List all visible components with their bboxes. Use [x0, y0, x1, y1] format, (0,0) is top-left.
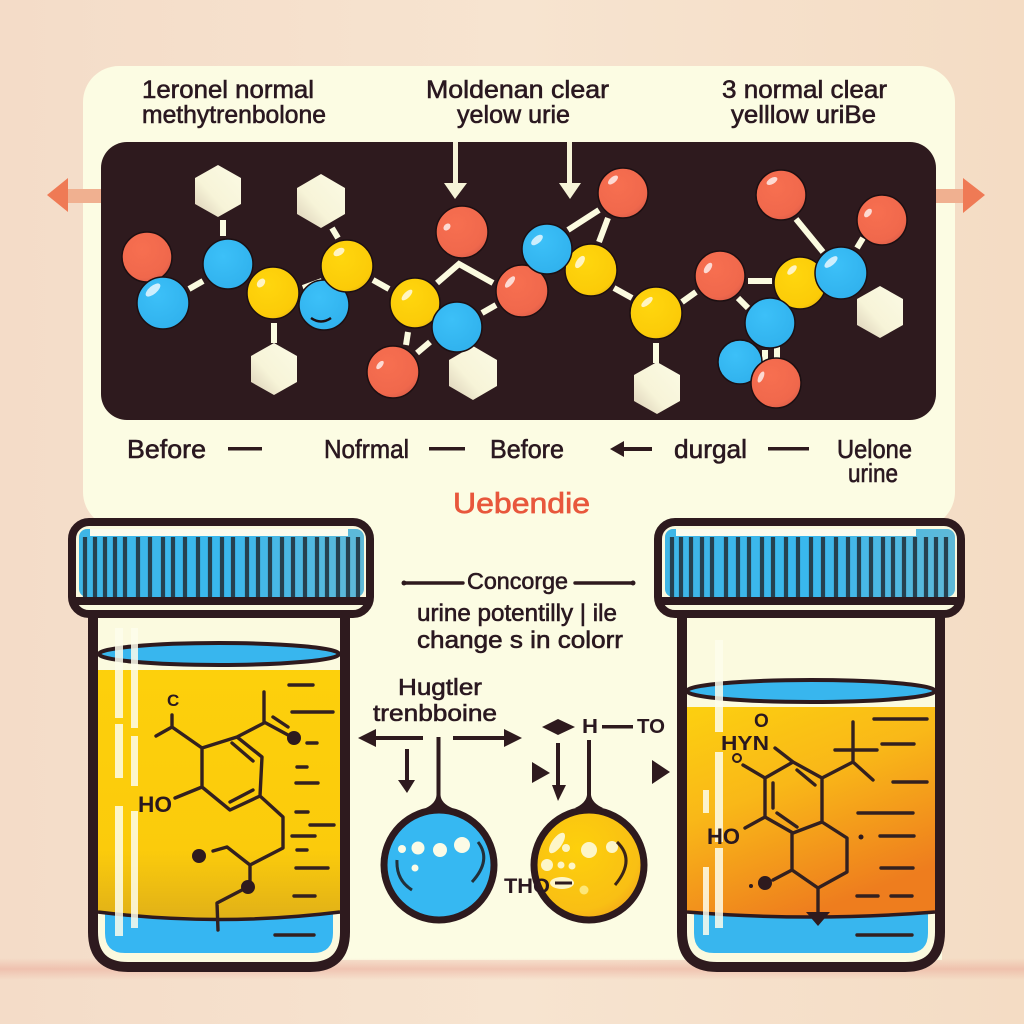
THO label — [504, 875, 574, 898]
center heading label: Moldenan clear — [426, 76, 609, 104]
measurement ticks — [275, 685, 334, 935]
arrow: left from stem — [358, 729, 423, 747]
arrow: triangle two — [652, 760, 670, 784]
jar body — [682, 610, 940, 967]
chemical structure: HYN — [721, 733, 769, 755]
jar: right after — [658, 522, 961, 967]
glass reflections — [703, 640, 723, 935]
trenbolone label: Hugtler — [398, 674, 482, 700]
arrow: right orange — [936, 178, 985, 213]
yellow urine — [98, 670, 340, 921]
timeline label row: durgal — [674, 434, 747, 464]
molecule hexagons — [195, 165, 903, 414]
left heading label: 1eronel normal — [142, 76, 314, 104]
H to TO label: TO — [637, 716, 665, 738]
right heading label — [722, 76, 887, 129]
H to TO label: H — [582, 716, 598, 738]
red subheading: Uebendie — [453, 488, 590, 520]
liquid surface — [687, 680, 935, 702]
blue base liquid — [105, 910, 333, 953]
trenbolone label — [373, 674, 497, 726]
center heading label — [426, 76, 609, 129]
timeline label row: Nofrmal — [324, 434, 409, 464]
left heading label: methytrenbolone — [142, 101, 326, 129]
liquid surface — [99, 643, 339, 665]
chemical structure: HO — [138, 792, 172, 817]
arrow: double head — [542, 719, 575, 735]
arrow: pointer down one — [444, 142, 467, 199]
chemical structure — [707, 711, 877, 926]
trenbolone label: trenbboine — [373, 700, 497, 726]
measurement ticks — [857, 719, 927, 935]
blue base liquid — [694, 910, 928, 953]
concorge caption: Concorge — [467, 568, 568, 594]
arrow: left orange — [47, 178, 102, 212]
panel: cream backing — [83, 66, 955, 960]
panel: dark molecule diagram — [101, 142, 936, 420]
arrow: pointer down two — [559, 142, 581, 199]
timeline label row: Uelone — [837, 434, 912, 464]
arrow: down to yellow flask — [552, 743, 566, 801]
molecule bonds — [189, 210, 863, 363]
left heading label — [142, 76, 326, 129]
chemical structure: O — [754, 711, 769, 732]
flask: blue — [384, 737, 494, 920]
bottom shadow band — [0, 958, 1024, 980]
concorge caption: urine potentilly | ile — [417, 600, 617, 627]
flask: yellow — [534, 740, 644, 920]
timeline label row: Before — [490, 434, 564, 464]
arrow: right from stem — [453, 729, 522, 747]
arrow: down to blue flask — [398, 749, 415, 793]
screw cap — [72, 522, 370, 614]
timeline label row: urine — [848, 458, 898, 488]
amber urine — [687, 707, 935, 918]
H to TO label — [582, 716, 665, 738]
center heading label: yelow urie — [457, 101, 570, 129]
molecule atoms — [122, 168, 907, 408]
jar: left before — [72, 522, 370, 967]
screw cap — [658, 522, 961, 614]
right heading label: yelllow uriBe — [731, 101, 876, 129]
timeline label row: Before — [127, 434, 206, 464]
timeline label row — [127, 434, 912, 488]
concorge caption — [402, 568, 636, 654]
arrow: triangle one — [532, 762, 550, 783]
glass reflections — [115, 628, 138, 936]
THO label: THO — [504, 875, 550, 898]
chemical structure: HO — [707, 824, 740, 849]
concorge caption: change s in colorr — [417, 627, 623, 654]
chemical structure: C — [167, 691, 179, 710]
right heading label: 3 normal clear — [722, 76, 887, 104]
chemical structure — [138, 691, 301, 930]
jar body — [93, 610, 345, 967]
